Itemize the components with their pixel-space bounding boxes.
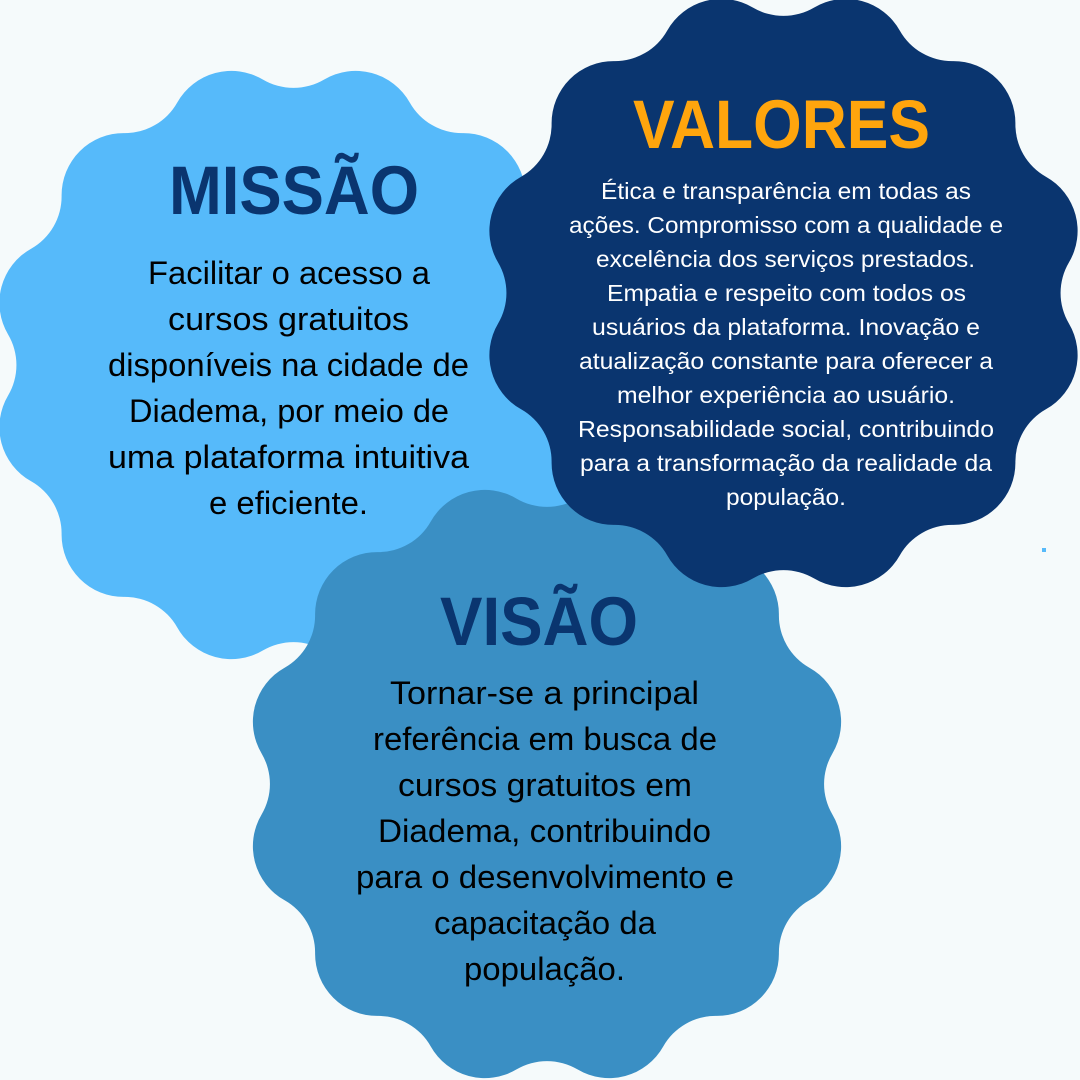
panel: valores <box>489 0 1078 587</box>
text block: valores description: população. <box>726 484 846 510</box>
text block: valores description: ações. Compromisso com a qualidade e <box>569 212 1003 238</box>
text block: valores description: melhor experiência ao usuário. <box>617 382 955 408</box>
valores wavy shape <box>489 0 1078 587</box>
text block: missão description: disponíveis na cidade de <box>108 347 469 383</box>
missão wavy shape <box>0 71 588 659</box>
text block: missão description: cursos gratuitos <box>168 301 409 337</box>
text block: valores description: usuários da plataforma. Inovação e <box>592 314 980 340</box>
text block: valores description: excelência dos serviços prestados. <box>596 246 975 272</box>
text block: visão description <box>356 675 734 987</box>
text block: missão description: e eficiente. <box>209 485 368 521</box>
text block: missão description: uma plataforma intuitiva <box>108 439 469 475</box>
visão wavy shape <box>253 490 841 1078</box>
text block: valores description: Ética e transparência em todas as <box>601 178 971 204</box>
heading: valores: VALORES <box>633 86 930 163</box>
heading: missão: MISSÃO <box>169 152 419 229</box>
text block: missão description: Diadema, por meio de <box>129 393 449 429</box>
text block: visão description: população. <box>464 951 625 987</box>
small speck <box>1042 548 1046 552</box>
text block: visão description: Diadema, contribuindo <box>378 813 711 849</box>
text block: missão description <box>108 255 469 521</box>
text block: valores description: Responsabilidade social, contribuindo <box>578 416 994 442</box>
text block: valores description: atualização constante para oferecer a <box>579 348 994 374</box>
text block: valores description: Empatia e respeito com todos os <box>607 280 966 306</box>
heading: visão: VISÃO <box>440 583 638 660</box>
missão fill behind the overlap <box>500 440 600 520</box>
text block: missão description: Facilitar o acesso a <box>148 255 430 291</box>
text block: valores description <box>569 178 1003 510</box>
text block: visão description: cursos gratuitos em <box>398 767 692 803</box>
panel: visão <box>253 490 841 1078</box>
text block: visão description: para o desenvolvimento e <box>356 859 734 895</box>
panel: missão <box>0 71 600 659</box>
text block: visão description: Tornar-se a principal <box>390 675 699 711</box>
text block: valores description: para a transformação da realidade da <box>580 450 993 476</box>
text block: visão description: referência em busca de <box>373 721 717 757</box>
text block: visão description: capacitação da <box>434 905 656 941</box>
